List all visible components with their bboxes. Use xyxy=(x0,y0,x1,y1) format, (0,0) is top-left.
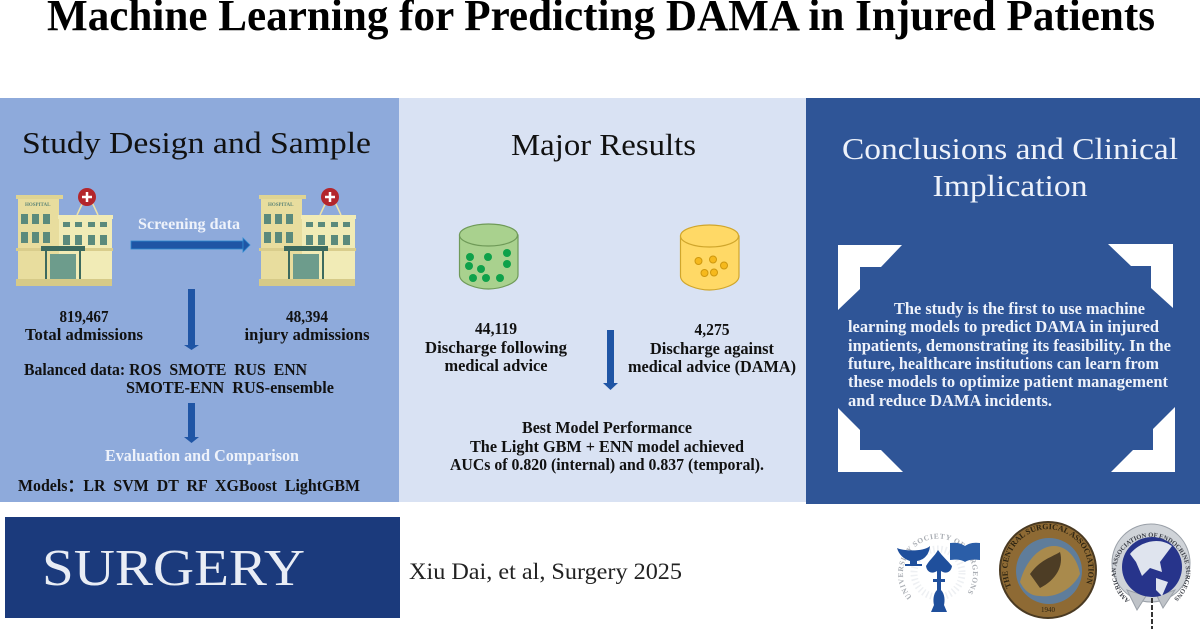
logo: central surgical association xyxy=(999,521,1097,619)
heading: conclusions xyxy=(842,131,1178,203)
stat: total admissions: 819,467 xyxy=(60,307,108,326)
stat: total admissions xyxy=(25,307,144,344)
icon: hospital total: HOSPITAL xyxy=(25,203,51,208)
arrow: screening data xyxy=(131,238,250,252)
panel: major results xyxy=(399,98,806,502)
icon: hospital total xyxy=(16,188,113,286)
logo: central surgical association: THE CENTRAL SURGICAL ASSOCIATION xyxy=(1002,524,1094,589)
text: conclusion body xyxy=(848,299,1171,410)
stat: discharge against advice xyxy=(628,320,796,376)
text: conclusion body: these models to optimize patient management xyxy=(848,372,1169,391)
text: conclusion body: The study is the first to use machine xyxy=(894,299,1145,318)
text: conclusion body: learning models to predict DAMA in injured xyxy=(848,317,1159,336)
icon: green database xyxy=(460,224,518,289)
text: conclusion body: inpatients, demonstrating its feasibility. In the xyxy=(848,336,1171,355)
stat: discharge following advice: Discharge following xyxy=(425,338,568,357)
arrow: down to evaluation xyxy=(184,403,199,443)
label: evaluation and comparison: Evaluation and Comparison xyxy=(105,446,299,465)
stat: discharge following advice: 44,119 xyxy=(475,319,517,338)
text: best model performance: AUCs of 0.820 (internal) and 0.837 (temporal). xyxy=(450,455,764,474)
stat: discharge against advice: 4,275 xyxy=(694,320,730,339)
text: best model performance xyxy=(450,418,764,474)
logo: american association of endocrine surgeons xyxy=(1112,524,1190,629)
stat: discharge against advice: Discharge against xyxy=(650,339,774,358)
text: best model performance: Best Model Performance xyxy=(522,418,692,437)
text: models: Models：LR SVM DT RF XGBoost LightGBM xyxy=(18,476,360,495)
stat: total admissions: Total admissions xyxy=(25,325,144,344)
panel: conclusions xyxy=(806,98,1200,504)
heading: major results: Major Results xyxy=(511,127,696,162)
journal banner xyxy=(5,517,400,618)
icon: yellow database xyxy=(680,225,739,290)
label: screening data: Screening data xyxy=(138,216,240,233)
stat: discharge following advice: medical advice xyxy=(444,356,548,375)
stat: injury admissions: injury admissions xyxy=(244,325,370,344)
arrow: down to best model xyxy=(603,330,618,390)
logo: american association of endocrine surgeons: AMERICAN ASSOCIATION OF ENDOCRINE SURGEONS xyxy=(1112,532,1190,602)
text: balanced data: SMOTE-ENN RUS-ensemble xyxy=(126,378,334,397)
stat: discharge against advice: medical advice (DAMA) xyxy=(628,357,796,376)
heading: study design: Study Design and Sample xyxy=(22,125,371,160)
logo: central surgical association: 1940 xyxy=(1041,606,1056,614)
text: conclusion body: future, healthcare institutions can learn from xyxy=(848,354,1159,373)
journal banner: SURGERY xyxy=(42,540,305,597)
stat: injury admissions xyxy=(244,307,370,344)
panel: study design and sample xyxy=(0,98,399,502)
citation: Xiu Dai, et al, Surgery 2025 xyxy=(409,559,682,584)
icon: hospital injury xyxy=(259,188,356,286)
text: conclusion body: and reduce DAMA incidents. xyxy=(848,391,1052,410)
heading: conclusions: Implication xyxy=(932,168,1088,203)
icon: hospital injury: HOSPITAL xyxy=(268,203,294,208)
stat: discharge following advice xyxy=(425,319,568,375)
text: balanced data xyxy=(24,360,334,397)
heading: conclusions: Conclusions and Clinical xyxy=(842,131,1178,166)
logo: society of university surgeons: UNIVERSITY SOCIETY OF SURGEONS xyxy=(898,534,978,600)
text: balanced data: Balanced data: ROS SMOTE RUS ENN xyxy=(24,360,307,379)
stat: injury admissions: 48,394 xyxy=(286,307,328,326)
corner brackets xyxy=(838,244,1175,472)
text: best model performance: The Light GBM + ENN model achieved xyxy=(470,437,744,456)
arrow: down to balanced data xyxy=(184,289,199,350)
